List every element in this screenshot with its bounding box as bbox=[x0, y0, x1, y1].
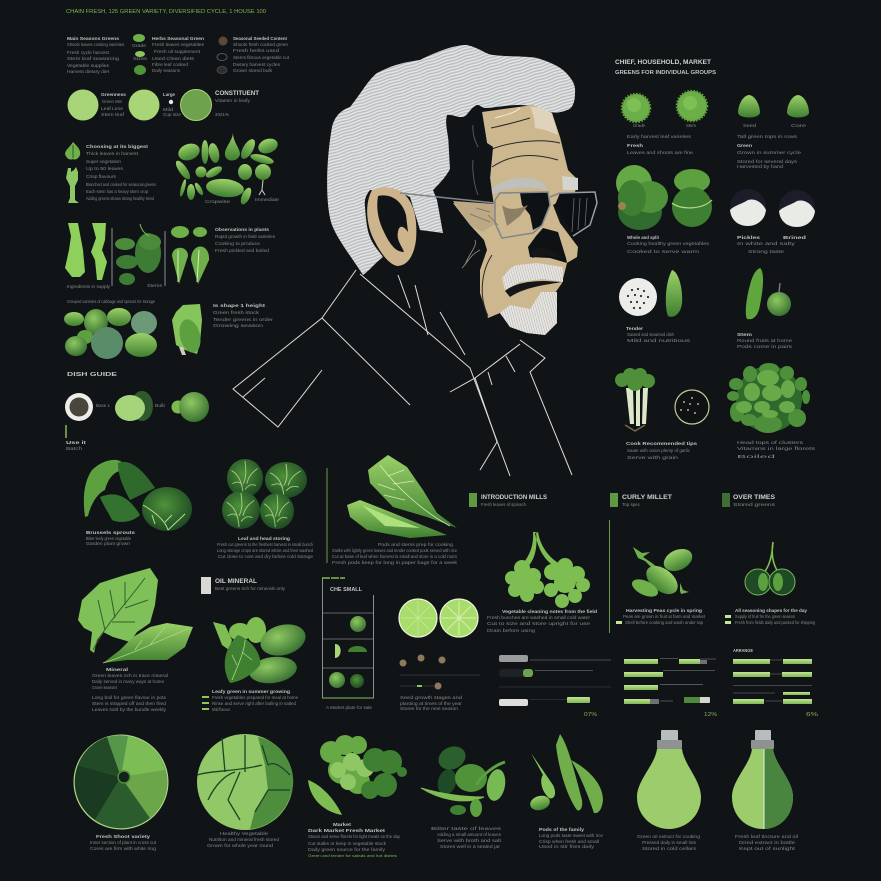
panel: lime slices and seeds: planting at times of the year bbox=[400, 701, 463, 706]
panel: top nutrient list: Used Clean diets bbox=[152, 56, 194, 61]
panel: dish guide row: Batch bbox=[66, 446, 83, 451]
panel: right row 1: Stored for several days bbox=[737, 159, 797, 164]
panel: spinach heading and illustration: Fresh vegetables prepared for meal at home bbox=[212, 695, 299, 700]
bar chart: left bbox=[499, 655, 611, 718]
panel: top nutrient list: Fresh cycle harvest bbox=[67, 50, 110, 55]
bottom: broccoli bbox=[308, 735, 407, 858]
panel: spinach heading and illustration: Leafy green in summer growing bbox=[212, 689, 290, 694]
panel: sprout and stalk notes bbox=[65, 142, 156, 203]
panel: top nutrient list: Fresh oil supplement bbox=[154, 49, 201, 54]
panel: three green circles: Leaf Lime bbox=[101, 106, 124, 111]
panel: leaf and pod bbox=[332, 455, 458, 565]
panel: header trio bbox=[469, 493, 775, 633]
panel: cabbage leaf and sprouts: Garden plant grown bbox=[86, 541, 131, 546]
panel: boxed chart: CHE SMALL bbox=[330, 587, 363, 593]
panel: right row 1: Grown in summer cycle bbox=[737, 150, 802, 155]
illustration: curly lettuce bbox=[487, 532, 597, 633]
panel: header trio: INTRODUCTION MILLS bbox=[481, 495, 547, 501]
panel: sprout and stalk notes: Adding greens shows strong healthy trend bbox=[86, 196, 155, 201]
panel: top nutrient list: Stem leaf seasoning bbox=[67, 56, 120, 61]
panel: right row 2: Whole and split bbox=[627, 235, 659, 240]
panel: sprouts cluster: Is shape 1 height bbox=[213, 303, 266, 308]
panel: sprout and stalk notes: Each stem has a heavy stem crop bbox=[86, 189, 149, 194]
shirt outline bbox=[233, 270, 572, 476]
panel: right row 4: Saute with onion plenty of garlic bbox=[627, 448, 690, 453]
panel: right row 2: Brined bbox=[783, 235, 806, 240]
hair bbox=[327, 45, 575, 275]
divider bbox=[326, 468, 328, 563]
icon: large curled leaf bbox=[172, 304, 204, 355]
panel: right row 1: Core bbox=[791, 123, 807, 128]
panel: boxed chart bbox=[322, 578, 374, 710]
panel: lime slices and seeds: Seed growth stages and bbox=[400, 695, 463, 700]
bottom: dark leaves cluster: Bitter taste of leaves bbox=[431, 826, 501, 831]
bottom: sliced wheel: Inner section of plant in cross cut bbox=[90, 840, 157, 845]
panel: right row 1: Tall green tops in rows bbox=[737, 134, 797, 139]
icon: green mounds: Grade bbox=[132, 43, 147, 48]
bottom: bottle left: Stored in cold cellars bbox=[642, 846, 696, 851]
bottom: pods: Used in stir fries daily bbox=[539, 844, 595, 849]
bottom: bottle right: Kept out of sunlight bbox=[739, 846, 796, 851]
panel: sprout and stalk notes: Crisp flavours bbox=[86, 174, 116, 179]
panel: right row 1: Harvested by hand bbox=[737, 164, 784, 169]
panel: top nutrient list: Herbs Seasonal Green bbox=[152, 36, 204, 41]
panel: lime slices and seeds bbox=[399, 599, 480, 711]
panel: large leaves: Long boil for green flavour in pots bbox=[92, 695, 166, 700]
panel: right row 1: Grade bbox=[633, 123, 646, 128]
temple flap bbox=[453, 201, 495, 232]
panel: right row 1: Green bbox=[737, 143, 752, 148]
illustration: hanging fruits: Supply of fruit for the green season bbox=[735, 614, 796, 619]
lens streaks bbox=[572, 198, 587, 232]
panel: top nutrient list: Dietary harvest cycles bbox=[233, 62, 280, 67]
bottom: pods bbox=[529, 734, 604, 849]
panel: right row 4: Vitamins in large florets bbox=[737, 446, 815, 451]
panel: right row 4: Cook Recommended tips bbox=[626, 441, 698, 446]
bottom: sliced wheel: Cores are firm with white ring bbox=[90, 846, 157, 851]
illustration: hanging fruits: All seasoning shapes for the day bbox=[735, 608, 807, 613]
leaf cluster: Cropwise bbox=[205, 199, 231, 204]
bottom: broccoli: Green and tender for salads and hot dishes bbox=[308, 853, 397, 858]
panel: stalks and plants row: Ingredients in supply bbox=[67, 284, 111, 289]
panel: top nutrient list bbox=[67, 34, 290, 75]
panel: sprouts cluster bbox=[64, 299, 274, 359]
bottom: cabbage globe: Nutrition and mineral fresh stored bbox=[209, 837, 280, 842]
ear bbox=[367, 187, 416, 266]
bar chart: right: ARRANGE bbox=[733, 648, 753, 653]
bottom: pods: Long pods taste sweet with rice bbox=[539, 833, 604, 838]
bottom: sliced wheel: Fresh Shoot variety bbox=[96, 834, 151, 839]
icon: stalk bbox=[66, 167, 79, 203]
icon: large broccoli head bbox=[727, 363, 810, 433]
bottom: broccoli: Daily green source for the family bbox=[308, 847, 386, 852]
eye lens dark bbox=[520, 192, 550, 230]
panel: leaf and pod: Stalks with lightly green leaves and tender cooked pods served with rice bbox=[332, 548, 458, 553]
panel: top nutrient list: Grown stored bulk bbox=[233, 68, 273, 73]
panel: lime slices and seeds: Stores for the next season bbox=[400, 706, 459, 711]
panel: spinach heading and illustration: Rinse and serve right after boiling in salted bbox=[212, 701, 297, 706]
bottom: bottle left: Pressed daily in small lots bbox=[642, 840, 696, 845]
panel: sprout and stalk notes: Super vegetation bbox=[86, 159, 122, 164]
bottom: bottle left: Green oil extract for cooking bbox=[637, 834, 701, 839]
leaf cluster: Immediate bbox=[255, 197, 280, 202]
leaf cluster bbox=[173, 133, 280, 206]
wrinkles bbox=[462, 108, 560, 316]
panel: top nutrient list: Fibre leaf cooked bbox=[152, 62, 189, 67]
bottom: dark leaves cluster: Stores well in a sealed jar bbox=[440, 844, 501, 849]
panel: sprouts cluster: Growing season bbox=[213, 323, 264, 328]
panel: right row 1: Seed bbox=[743, 123, 757, 128]
panel: spinach heading and illustration: Mild flavour bbox=[212, 707, 230, 712]
panel: stalks and plants row bbox=[65, 223, 275, 289]
beard bbox=[500, 292, 557, 335]
bottom: cabbage globe: Healthy Vegetable bbox=[220, 831, 269, 836]
panel: right row 1: Stem bbox=[686, 123, 697, 128]
bar chart: right: 6% bbox=[806, 712, 819, 718]
panel: three green circles: Greenness bbox=[101, 92, 127, 97]
panel: three green circles: Stem leaf bbox=[101, 112, 125, 117]
panel: right row 1: Fresh bbox=[627, 143, 643, 148]
bottom: bottle right: Fresh leaf tincture and oil bbox=[735, 834, 798, 839]
panel: sprout and stalk notes: Up to 50 leaves bbox=[86, 166, 123, 171]
panel: leaf and pod: Fresh pods keep for long in paper bags for a week bbox=[332, 560, 458, 565]
icon: brown seeds bbox=[217, 36, 228, 74]
bottom: broccoli: Steam and serve florets for light meals on the day bbox=[308, 834, 401, 839]
bar chart: right bbox=[733, 648, 819, 718]
panel: top nutrient list: Shoots leaves cooking varieties bbox=[67, 42, 124, 47]
bottom: pods: Pods of the family bbox=[539, 827, 585, 832]
bottom: cabbage globe: Grown for whole year round bbox=[207, 843, 274, 848]
panel: sprouts cluster: Grouped varieties of cabbage and sprouts for storage bbox=[67, 299, 156, 304]
panel: large leaves: Daily served in many ways at home bbox=[92, 679, 165, 684]
panel: four sprouts: Leaf and head storing bbox=[238, 536, 290, 541]
bottom: broccoli: Dark Market Fresh Market bbox=[308, 828, 386, 833]
panel: spinach heading and illustration bbox=[201, 577, 309, 712]
bar chart: middle bbox=[624, 658, 718, 718]
panel: large leaves: Leaves sold by the bundle weekly bbox=[92, 707, 167, 712]
panel: sprout and stalk notes: Blanched and cooked for seasonal greens bbox=[86, 182, 156, 187]
panel: header trio: Stored greens bbox=[733, 502, 775, 507]
panel: three green circles bbox=[68, 90, 259, 120]
panel: stalks and plants row: Rapid growth in field varieties bbox=[215, 234, 275, 239]
panel: dish guide row: Bulb bbox=[155, 403, 166, 408]
panel: four sprouts: Cut close to core and dry before cold storage bbox=[218, 554, 314, 559]
panel: sprout and stalk notes: Choosing at its biggest bbox=[86, 144, 149, 149]
panel: stalks and plants row: Fresh pickled and boiled bbox=[215, 248, 270, 253]
panel: right row 3: Sauted and steamed dish bbox=[627, 332, 675, 337]
heading: dish guide: DISH GUIDE bbox=[67, 372, 118, 378]
panel: right row 4: Serve with grain bbox=[627, 455, 679, 460]
panel: large leaves: Green leaves rich in trace mineral bbox=[92, 673, 168, 678]
bar chart: middle: 12% bbox=[704, 712, 718, 718]
bottom: sliced wheel bbox=[74, 735, 168, 851]
panel: header trio: CURLY MILLET bbox=[622, 495, 672, 501]
panel: right row 3: Stem bbox=[737, 332, 752, 337]
illustration: pods pair: Harvesting Peas cycle in spring bbox=[626, 608, 702, 613]
bottom: bottle right bbox=[732, 730, 798, 851]
panel: right row 1 bbox=[622, 91, 809, 169]
panel: stalks and plants row: Observations in plants bbox=[215, 227, 270, 232]
panel: boxed chart: A Market plate for sale bbox=[326, 705, 373, 710]
illustration: pods pair: Shell before cooking and wash under tap bbox=[625, 620, 704, 625]
icon: green mounds: Sizes bbox=[133, 56, 147, 61]
panel: stalks and plants row: Cooking to produce bbox=[215, 241, 261, 246]
panel: cabbage leaf and sprouts: Brussels sprouts bbox=[86, 530, 136, 535]
panel: three green circles: Mild bbox=[163, 107, 174, 112]
right lens bbox=[555, 192, 597, 236]
panel: right column heading: CHIEF, HOUSEHOLD, MARKET bbox=[615, 60, 711, 66]
panel: right row 4: Head tops of clusters bbox=[737, 440, 803, 445]
panel: right row 2: Pickles bbox=[737, 235, 761, 240]
panel: top nutrient list: Main Seasons Greens bbox=[67, 36, 120, 41]
bottom: bottle left bbox=[637, 730, 701, 851]
panel: four sprouts bbox=[217, 459, 314, 559]
bottom: broccoli: Cut stalks or keep in vegetable stock bbox=[308, 841, 387, 846]
forehead highlight bbox=[530, 107, 558, 135]
mustache bbox=[502, 263, 563, 290]
bottom: pods: Crisp when fresh and small bbox=[539, 839, 599, 844]
panel: top nutrient list: Seasonal Seeded Content bbox=[233, 36, 287, 41]
panel: right row 2: In white and salty bbox=[737, 241, 797, 246]
panel: top nutrient list: Stems fibrous vegetable cut bbox=[233, 55, 290, 60]
illustration: pods pair: Peas are grown in fruit at farm and market bbox=[623, 614, 706, 619]
icon: green mounds bbox=[132, 34, 147, 75]
eye creases bbox=[502, 205, 528, 226]
title strip: CHAIN FRESH, 125 GREEN VARIETY, DIVERSIFIED CYCLE, 1 HOUSE 100 bbox=[66, 9, 266, 15]
panel: spinach heading and illustration: Best greens rich for minerals only bbox=[215, 586, 286, 591]
panel: top nutrient list: Harvest dietary diet bbox=[67, 69, 110, 74]
illustration: curly lettuce: Fresh bunches are washed in small cold water bbox=[487, 615, 591, 620]
illustration: hanging fruits: Fresh from fields daily and packed for shipping bbox=[735, 620, 816, 625]
panel: large leaves: Grown seasons bbox=[92, 685, 117, 690]
bottom: cabbage globe bbox=[197, 734, 293, 848]
panel: three green circles: Vitamin in leafy bbox=[215, 98, 251, 103]
panel: top nutrient list: Shoots fresh cooked green bbox=[233, 42, 289, 47]
mouth bbox=[505, 281, 562, 297]
panel: right row 3: Tender bbox=[626, 326, 643, 331]
panel: cabbage leaf and sprouts bbox=[84, 460, 192, 546]
illustration: hanging fruits bbox=[725, 542, 816, 625]
panel: sprouts cluster: Green fresh stock bbox=[213, 310, 260, 315]
panel: top nutrient list: Vegetable supplies bbox=[67, 63, 109, 68]
panel: right row 3: Mild and nutritious bbox=[627, 338, 690, 343]
panel: top nutrient list: Daily seasons bbox=[152, 68, 180, 73]
panel: leaf and pod: Cut at base of leaf when harvest is small and store in a cold room bbox=[332, 554, 458, 559]
illustration: pods pair bbox=[616, 545, 706, 625]
panel: right row 4: Boiled bbox=[737, 454, 777, 459]
panel: leaf and pod: Pods and stems prep for cooking bbox=[378, 542, 454, 547]
panel: header trio: Fresh leaves of spinach bbox=[481, 502, 527, 507]
panel: right column heading bbox=[615, 60, 716, 76]
panel: stalks and plants row: Stems bbox=[147, 283, 162, 288]
panel: right row 4 bbox=[615, 363, 815, 460]
panel: dish guide row: Base 1 bbox=[96, 403, 111, 408]
brows bbox=[487, 176, 578, 196]
illustration: curly lettuce: Vegetable cleaning notes from the field bbox=[502, 609, 597, 614]
panel: top nutrient list: Fresh leaves vegetables bbox=[152, 42, 204, 47]
panel: three green circles: CONSTITUENT bbox=[215, 91, 259, 97]
face bbox=[453, 105, 578, 335]
panel: right column heading: GREENS FOR INDIVIDUAL GROUPS bbox=[615, 70, 716, 76]
bottom: dark leaves cluster: Adding a small amount of leaves bbox=[437, 832, 501, 837]
panel: header trio: Top spec bbox=[622, 502, 640, 507]
panel: right row 1: Leaves and shoots are fine bbox=[627, 150, 694, 155]
shadow between temple and forehead bbox=[447, 105, 494, 207]
panel: dish guide row: Use it bbox=[66, 440, 87, 445]
glasses bbox=[400, 192, 597, 238]
illustration: curly lettuce: Drain before using bbox=[487, 628, 536, 633]
panel: cabbage leaf and sprouts: Bitter leafy green vegetable bbox=[86, 536, 132, 541]
panel: large leaves: Mineral bbox=[106, 667, 128, 672]
panel: sprouts cluster: Tender greens in order bbox=[213, 317, 274, 322]
bottom: bottle right: Dried extract in bottle bbox=[739, 840, 796, 845]
bottom: dark leaves cluster: Serve with broth and salt bbox=[437, 838, 502, 843]
panel: right row 1: Early harvest leaf varieties bbox=[627, 134, 691, 139]
panel: three green circles: Cup size bbox=[163, 112, 182, 117]
panel: right row 3 bbox=[619, 268, 793, 349]
illustration: curly lettuce: Cut to size and store upright for use bbox=[487, 621, 591, 626]
panel: right row 2 bbox=[616, 165, 815, 254]
panel: three green circles: Large bbox=[163, 92, 175, 97]
panel: right row 2: Cooking healthy green vegetables bbox=[627, 241, 709, 246]
panel: right row 3: Round fruits at home bbox=[737, 338, 793, 343]
bottom: dark leaves cluster bbox=[421, 742, 508, 849]
panel: four sprouts: Long storage crops are stored whole and then washed bbox=[217, 548, 314, 553]
panel: four sprouts: Fresh cut greens to the freshest harvest in small bunch bbox=[217, 542, 314, 547]
icon: leafy sprout bbox=[65, 142, 80, 160]
panel: large leaves: Stem is stripped off and then fried bbox=[92, 701, 167, 706]
panel: dish guide row bbox=[65, 391, 209, 451]
man portrait bbox=[233, 45, 597, 476]
panel: large leaves bbox=[78, 568, 193, 712]
panel: right row 2: Strong taste bbox=[748, 249, 785, 254]
bottom: broccoli: Market bbox=[333, 822, 352, 827]
nose shadow bbox=[528, 228, 567, 263]
panel: right row 2: Cooked to serve warm bbox=[627, 249, 700, 254]
bar chart: left: 07% bbox=[584, 712, 598, 718]
panel: three green circles: 2021% bbox=[215, 112, 229, 117]
panel: top nutrient list: Fresh herbs used bbox=[233, 48, 280, 53]
panel: header trio: OVER TIMES bbox=[733, 495, 775, 501]
panel: spinach heading and illustration: OIL MINERAL bbox=[215, 579, 257, 585]
panel: three green circles: Green Min bbox=[102, 99, 123, 104]
panel: sprout and stalk notes: Thick leaves in harvest bbox=[86, 151, 139, 156]
panel: right row 3: Pods come in pairs bbox=[737, 344, 792, 349]
